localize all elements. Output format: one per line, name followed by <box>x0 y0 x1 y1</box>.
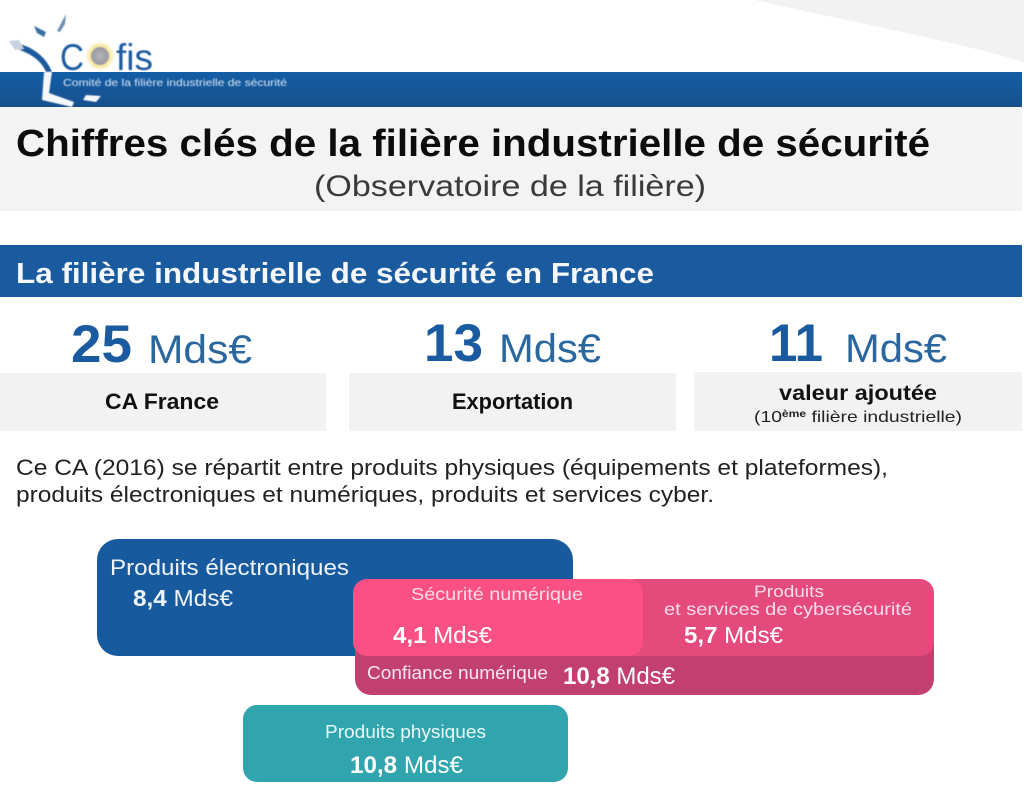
header banner <box>0 14 1022 107</box>
section heading: La filière industrielle de sécurité en France <box>16 258 654 290</box>
panel: produits électroniques <box>97 539 573 656</box>
panel: produits physiques: Produits physiques <box>325 722 486 742</box>
stat: Exportation: Mds€ <box>499 327 601 371</box>
logo: Cofis: fis <box>116 37 153 78</box>
panel: sécurité numérique <box>353 579 643 656</box>
title panel <box>0 107 1022 211</box>
panel: produits électroniques: Produits électroniques <box>110 555 349 580</box>
stat: Exportation: Exportation <box>452 389 573 414</box>
stat: valeur ajoutée: filière industrielle) <box>806 409 962 426</box>
stat: CA France: 25 <box>71 315 132 374</box>
logo: Cofis: C <box>60 37 84 78</box>
panel: confiance numérique: Confiance numérique <box>367 662 548 683</box>
description text: Ce CA (2016) se répartit entre produits physiques (équipements et plateformes), <box>16 455 888 480</box>
title: Chiffres clés de la filière industrielle de sécurité <box>16 123 930 165</box>
panel: produits et services de cybersécurité: Produits <box>754 582 824 601</box>
logo: Cofis: Comité de la filière industrielle de sécurité <box>63 77 287 89</box>
panel: produits physiques <box>243 705 568 782</box>
panel: confiance numérique: 10,8 Mds€ <box>563 663 676 690</box>
stat: CA France <box>0 315 326 431</box>
background corner swoosh <box>755 0 1024 62</box>
stat: valeur ajoutée: ème <box>782 409 807 420</box>
stat: valeur ajoutée: 11 <box>769 314 823 373</box>
panel: produits et services de cybersécurité: et services de cybersécurité <box>664 599 912 619</box>
panel: confiance numérique <box>355 630 934 695</box>
section heading <box>0 245 1022 297</box>
panel: produits et services de cybersécurité <box>620 579 934 656</box>
stat: CA France: Mds€ <box>148 328 252 372</box>
subtitle: (Observatoire de la filière) <box>314 170 706 203</box>
panel: produits et services de cybersécurité: 5,7 Mds€ <box>684 622 783 648</box>
panel: produits physiques: 10,8 Mds€ <box>350 752 464 779</box>
description text: produits électroniques et numériques, produits et services cyber. <box>16 482 714 507</box>
stat: valeur ajoutée <box>694 314 1022 431</box>
stat: Exportation: 13 <box>424 314 483 373</box>
description text <box>16 455 888 507</box>
stat: Exportation <box>349 314 676 431</box>
panel: produits électroniques: 8,4 Mds€ <box>133 585 233 611</box>
stat: valeur ajoutée: (10 <box>754 409 777 426</box>
panel: sécurité numérique: 4,1 Mds€ <box>393 622 492 648</box>
stat: CA France: CA France <box>105 389 219 414</box>
panel: sécurité numérique: Sécurité numérique <box>411 584 583 604</box>
logo: Cofis <box>9 14 287 107</box>
stat: valeur ajoutée: valeur ajoutée <box>779 382 937 405</box>
stat: valeur ajoutée: Mds€ <box>845 327 947 371</box>
